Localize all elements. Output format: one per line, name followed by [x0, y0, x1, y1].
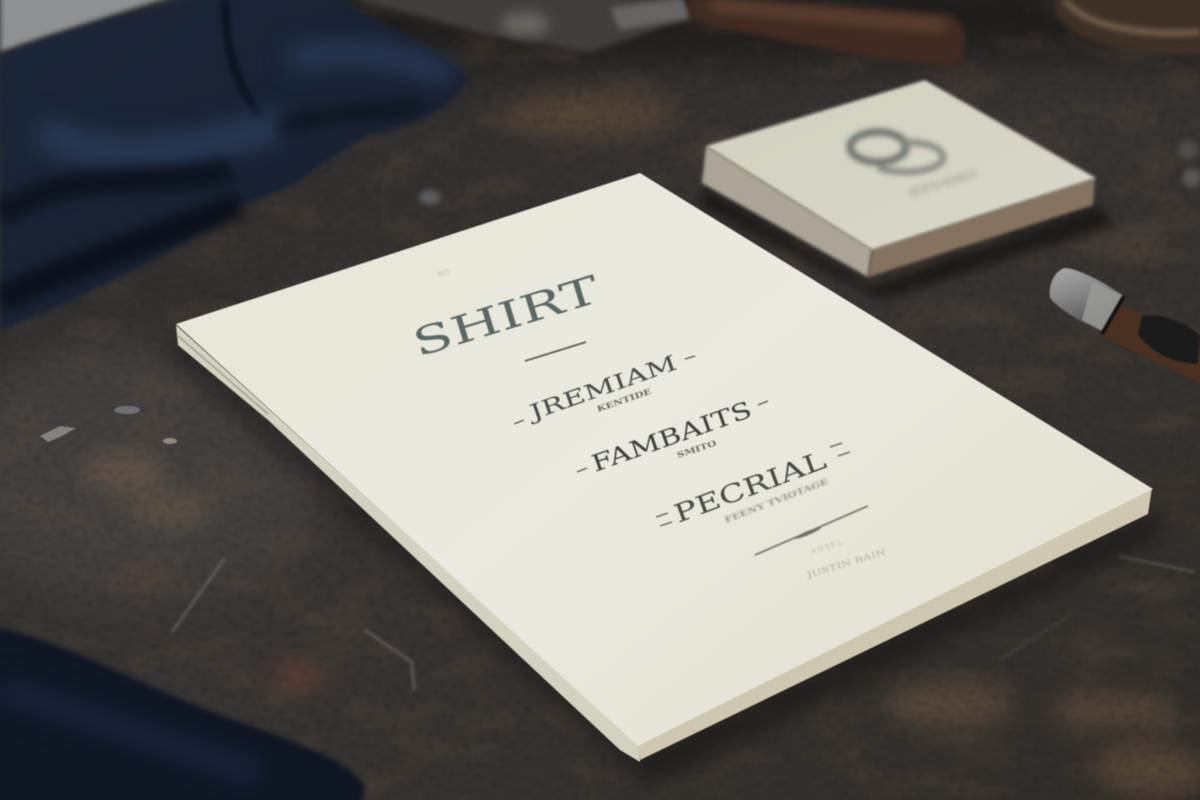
navy cloth, bottom left	[0, 628, 365, 800]
paper left edge	[176, 325, 640, 762]
numeral 9 on card: STUDIO	[908, 169, 978, 200]
stack top	[706, 80, 1096, 250]
ornament and footer text	[755, 506, 887, 580]
ornament below title	[525, 342, 586, 361]
small mark above title: NO.	[436, 268, 452, 279]
paper top	[176, 173, 1153, 746]
menu item: RECIMAL	[656, 443, 850, 529]
menu item: FAMBAITS: SMITO	[676, 438, 718, 460]
ornament and footer text: ANSEL	[809, 538, 843, 556]
navy cloth, top left	[0, 0, 468, 330]
small tool with metal ferrule	[1050, 268, 1200, 385]
card stack	[702, 80, 1096, 277]
shadow under paper	[165, 335, 1160, 785]
printed title block	[408, 267, 604, 366]
menu item: PREMIUM	[514, 351, 695, 426]
menu item: FAMBAITS	[577, 397, 768, 478]
menu item: FAMBAITS: FAMBAITS	[588, 397, 755, 478]
menu item: PREMIUM: KENTIDE	[595, 386, 653, 414]
stack right edge	[868, 178, 1095, 277]
menu item: PREMIUM: JREMIAM	[524, 351, 680, 426]
knife with wooden handle, top	[340, 0, 966, 68]
scratches and flecks	[40, 141, 1200, 690]
ornament and footer text: JUSTIN BAIN	[805, 547, 887, 580]
numeral 9 on card	[850, 132, 978, 200]
round wooden object, top right	[1055, 0, 1200, 55]
menu item: RECIMAL: FEENY TVIOTAGE	[723, 476, 829, 525]
paper sheet stack	[176, 173, 1153, 762]
menu item: RECIMAL: PECRIAL	[670, 445, 830, 529]
shadow under card stack	[700, 185, 1115, 300]
title: SHIRT: SHIRT	[408, 267, 604, 366]
paper right edge	[638, 488, 1152, 760]
top left pale corner	[0, 0, 190, 52]
stack left edge	[702, 146, 872, 277]
